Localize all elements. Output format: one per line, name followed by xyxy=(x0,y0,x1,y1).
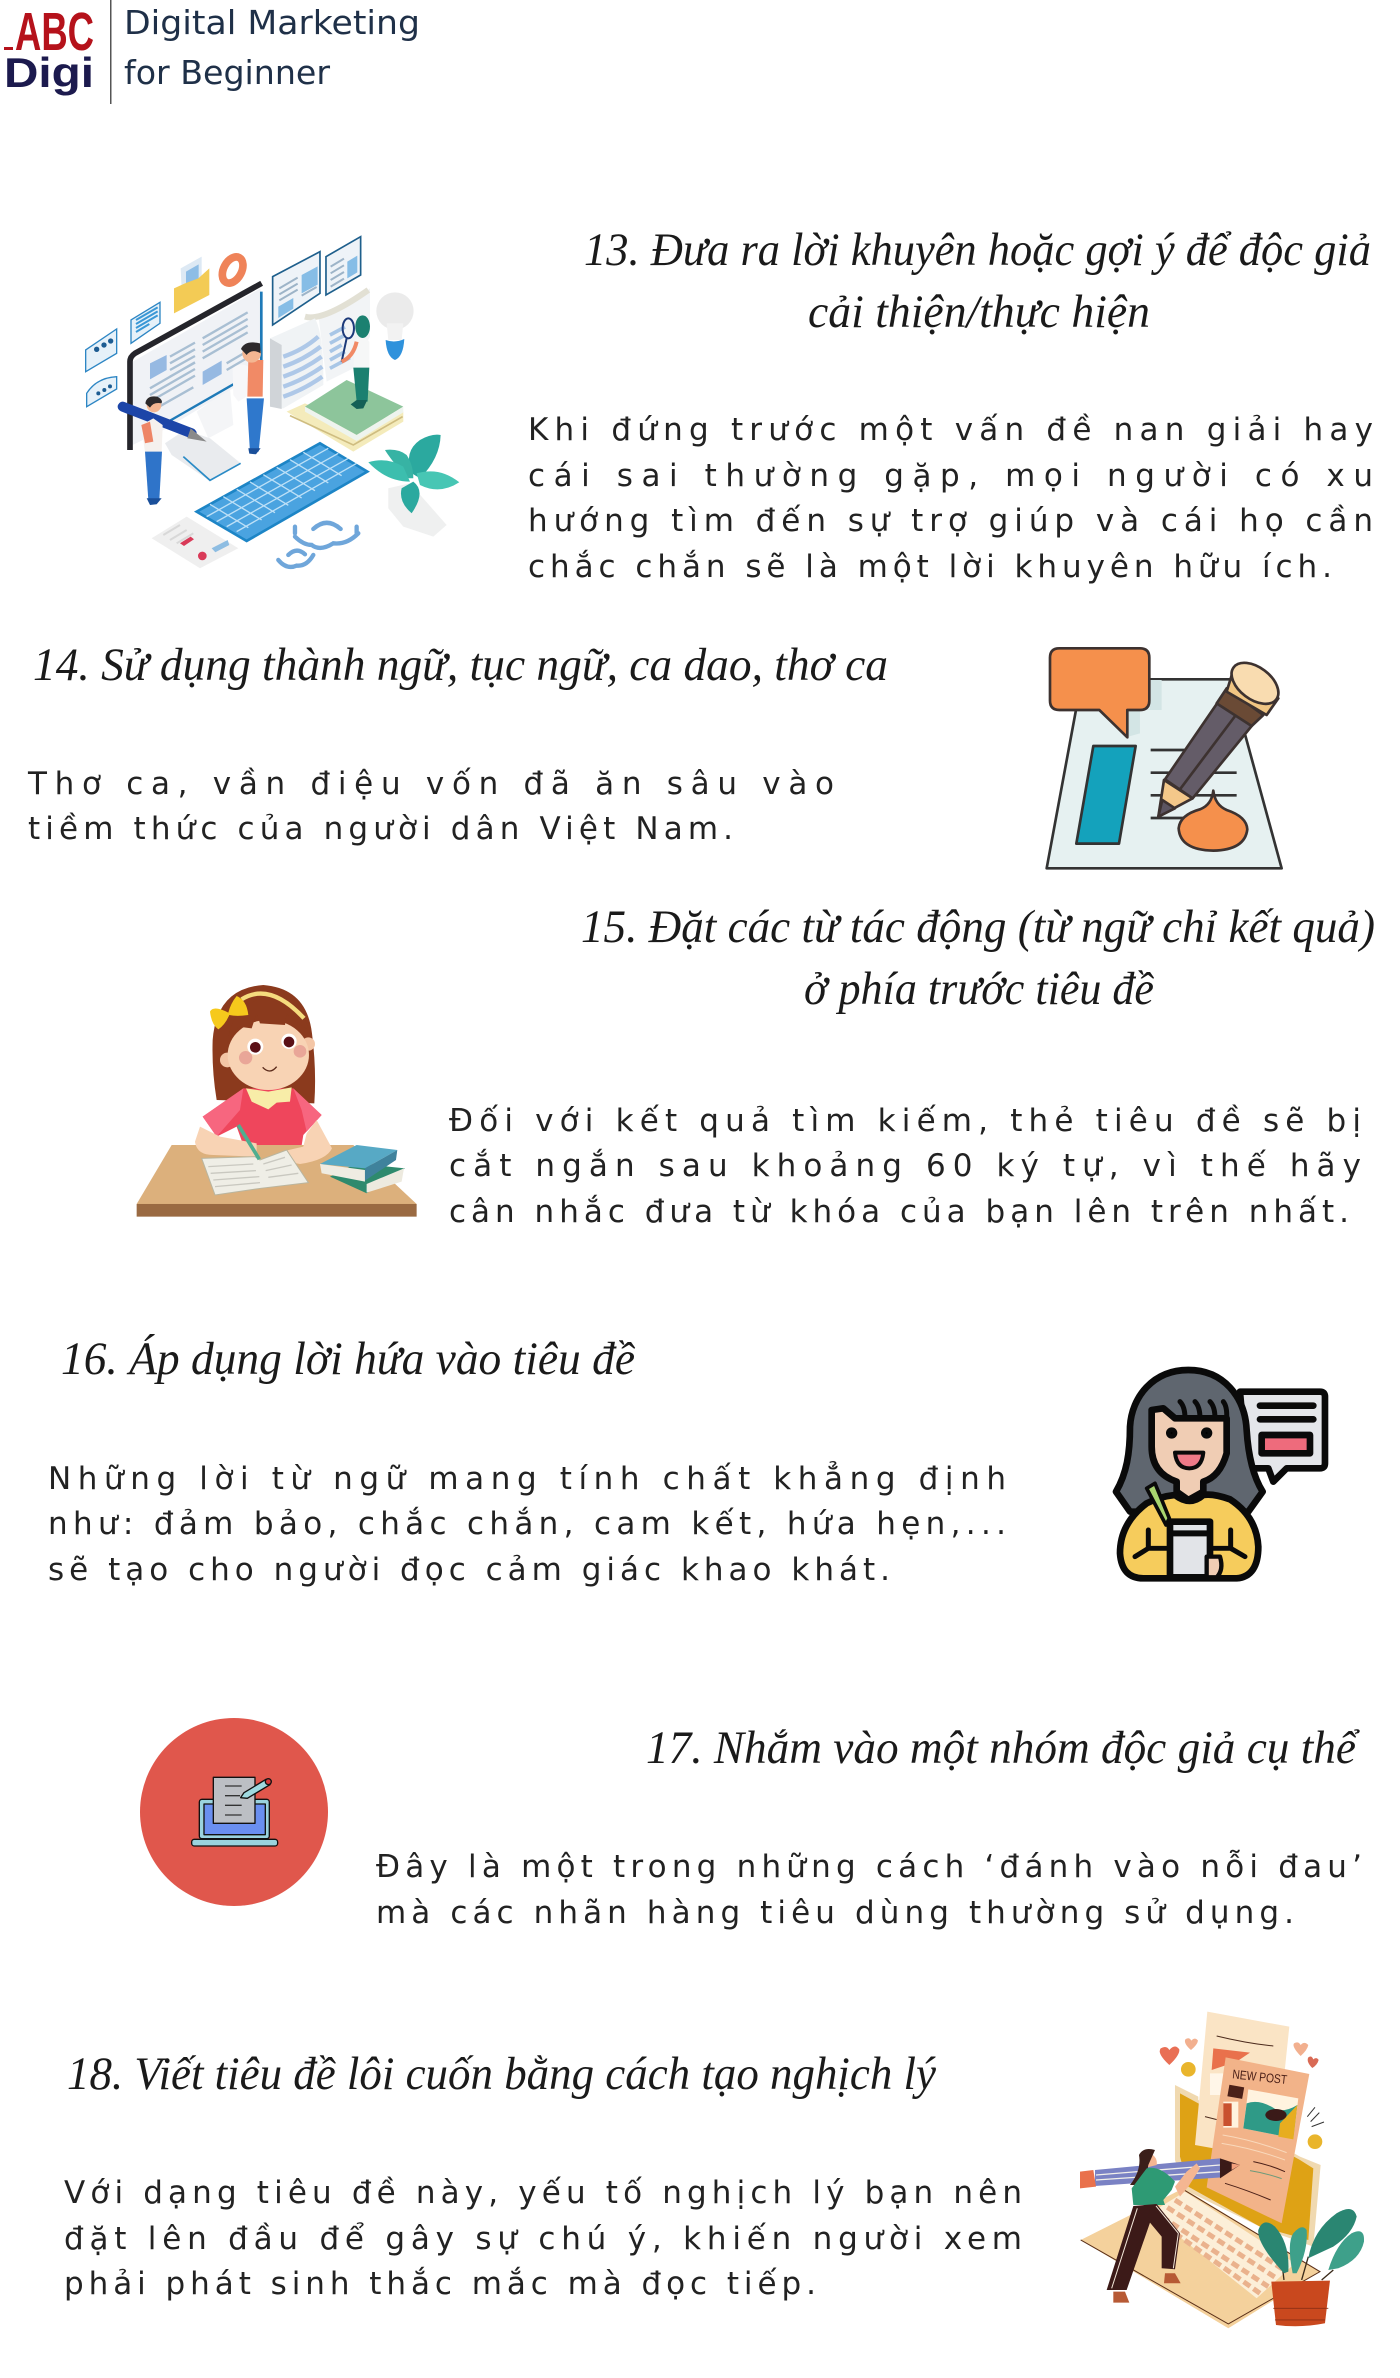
logo mark: ABC Digi xyxy=(4,2,94,96)
body 15: Đối với kết quả tìm kiếm, thẻ tiêu đề sẽ bị xyxy=(449,1103,1361,1139)
illustration: girl studying at desk xyxy=(137,985,417,1217)
hair bow xyxy=(210,996,248,1029)
body 16: Những lời từ ngữ mang tính chất khẳng định xyxy=(48,1460,1006,1497)
body 17: Đây là một trong những cách ‘đánh vào nỗi đau’ xyxy=(376,1849,1362,1885)
document xyxy=(213,1777,255,1823)
envelope and ring xyxy=(174,253,247,313)
heading 15 xyxy=(581,901,1375,1015)
logo tagline: for Beginner xyxy=(124,53,330,92)
face xyxy=(1152,1408,1227,1500)
heading 15: 15. Đặt các từ tác động (từ ngữ chỉ kết quả) xyxy=(581,901,1375,953)
body 15: cắt ngắn sau khoảng 60 ký tự, vì thế hãy xyxy=(449,1148,1361,1184)
body 16 xyxy=(48,1460,1006,1588)
illustration: notepad, pencil and speech bubble xyxy=(1047,648,1286,868)
blue block xyxy=(1076,746,1136,844)
body 16: sẽ tạo cho người đọc cảm giác khao khát. xyxy=(48,1552,890,1588)
pencil xyxy=(1158,655,1286,817)
label: new post: NEW POST xyxy=(1232,2067,1288,2087)
logo mark: ABC Digi: ABC xyxy=(15,2,94,62)
heading 14: 14. Sử dụng thành ngữ, tục ngữ, ca dao, thơ ca xyxy=(33,639,888,691)
green pen xyxy=(1147,1483,1169,1525)
logo mark: ABC Digi: Digi xyxy=(4,49,94,96)
paper xyxy=(1047,679,1282,868)
yellow sweater xyxy=(1120,1495,1258,1578)
section 16 xyxy=(48,1333,1006,1588)
laptop xyxy=(192,1777,278,1846)
body 18: phải phát sinh thắc mắc mà đọc tiếp. xyxy=(64,2266,816,2302)
heading 18: 18. Viết tiêu đề lôi cuốn bằng cách tạo nghịch lý xyxy=(67,2048,936,2100)
section 14 xyxy=(27,639,888,847)
body 16: như: đảm bảo, chắc chắn, cam kết, hứa hẹn,... xyxy=(48,1506,1006,1542)
section 17 xyxy=(376,1722,1362,1931)
desk xyxy=(137,1145,417,1217)
text lines xyxy=(1151,750,1237,818)
heading 16: 16. Áp dụng lời hứa vào tiêu đề xyxy=(61,1333,635,1385)
body 13: chắc chắn sẽ là một lời khuyên hữu ích. xyxy=(528,549,1332,585)
body 13: hướng tìm đến sự trợ giúp và cái họ cần xyxy=(528,503,1373,539)
back page xyxy=(1195,2012,1289,2157)
plant xyxy=(368,435,459,537)
keyboard xyxy=(197,443,367,541)
body 18 xyxy=(64,2175,1022,2302)
standing person xyxy=(233,342,264,454)
logo tagline xyxy=(124,3,420,92)
paper and big pen xyxy=(123,407,241,481)
pen xyxy=(241,1779,270,1798)
potted plant xyxy=(1258,2209,1364,2326)
notepad xyxy=(1170,1522,1210,1577)
section 18 xyxy=(64,2048,1022,2302)
section 15 xyxy=(449,901,1375,1230)
section 13 xyxy=(528,224,1373,585)
dress xyxy=(203,1087,322,1145)
icon: red circle with laptop and document xyxy=(140,1718,328,1906)
body 15: cân nhắc đưa từ khóa của bạn lên trên nhất. xyxy=(449,1194,1349,1230)
hand xyxy=(1207,1557,1221,1577)
body 17 xyxy=(376,1849,1362,1931)
chat bubbles xyxy=(86,302,160,407)
person with magnifier xyxy=(342,315,370,409)
body 17: mà các nhãn hàng tiêu dùng thường sử dụng. xyxy=(376,1895,1294,1931)
speech bubble xyxy=(1240,1392,1325,1482)
body 13: cái sai thường gặp, mọi người có xu xyxy=(528,458,1373,494)
laptop screen xyxy=(1175,2085,1321,2247)
gears xyxy=(278,523,358,567)
body 13 xyxy=(528,412,1373,585)
ink drop xyxy=(1179,791,1247,851)
open notebook xyxy=(202,1125,308,1195)
body 14: tiềm thức của người dân Việt Nam. xyxy=(28,811,733,847)
heading 13 xyxy=(584,224,1371,338)
floating documents xyxy=(273,237,361,325)
heading 15: ở phía trước tiêu đề xyxy=(804,963,1154,1015)
body 18: Với dạng tiêu đề này, yếu tố nghịch lý bạn nên xyxy=(64,2175,1022,2211)
speech bubble xyxy=(1050,648,1149,737)
laptop keyboard deck xyxy=(1081,2188,1320,2328)
illustration: woman with notepad and speech bubble xyxy=(1116,1370,1325,1578)
illustration: isometric content workspace xyxy=(86,237,459,568)
body 15 xyxy=(449,1103,1361,1230)
illustration: woman with pencil on laptop, new post xyxy=(1080,2012,1364,2328)
report sheet xyxy=(152,517,238,568)
arms xyxy=(195,1120,332,1164)
hair xyxy=(212,985,315,1103)
body 18: đặt lên đầu để gây sự chú ý, khiến người xem xyxy=(64,2221,1022,2257)
monitor xyxy=(130,283,262,450)
logo header xyxy=(4,0,420,104)
stacked books xyxy=(320,1145,405,1193)
heading 13: cải thiện/thực hiện xyxy=(808,286,1150,338)
woman with pencil xyxy=(1080,2149,1240,2303)
hair xyxy=(1116,1370,1263,1512)
logo tagline: Digital Marketing xyxy=(124,3,420,42)
face xyxy=(220,994,315,1090)
heading 17: 17. Nhắm vào một nhóm độc giả cụ thể xyxy=(646,1722,1360,1774)
person with pen xyxy=(141,396,163,505)
body 13: Khi đứng trước một vấn đề nan giải hay xyxy=(528,412,1373,448)
new post page xyxy=(1207,2057,1309,2223)
heading 13: 13. Đưa ra lời khuyên hoặc gợi ý để độc giả xyxy=(584,224,1371,276)
book stack xyxy=(287,380,403,452)
open book xyxy=(270,288,370,409)
hearts and smileys xyxy=(1160,2038,1324,2149)
body 14: Thơ ca, vần điệu vốn đã ăn sâu vào xyxy=(27,766,834,802)
body 14 xyxy=(27,766,834,847)
light bulb xyxy=(376,292,414,360)
